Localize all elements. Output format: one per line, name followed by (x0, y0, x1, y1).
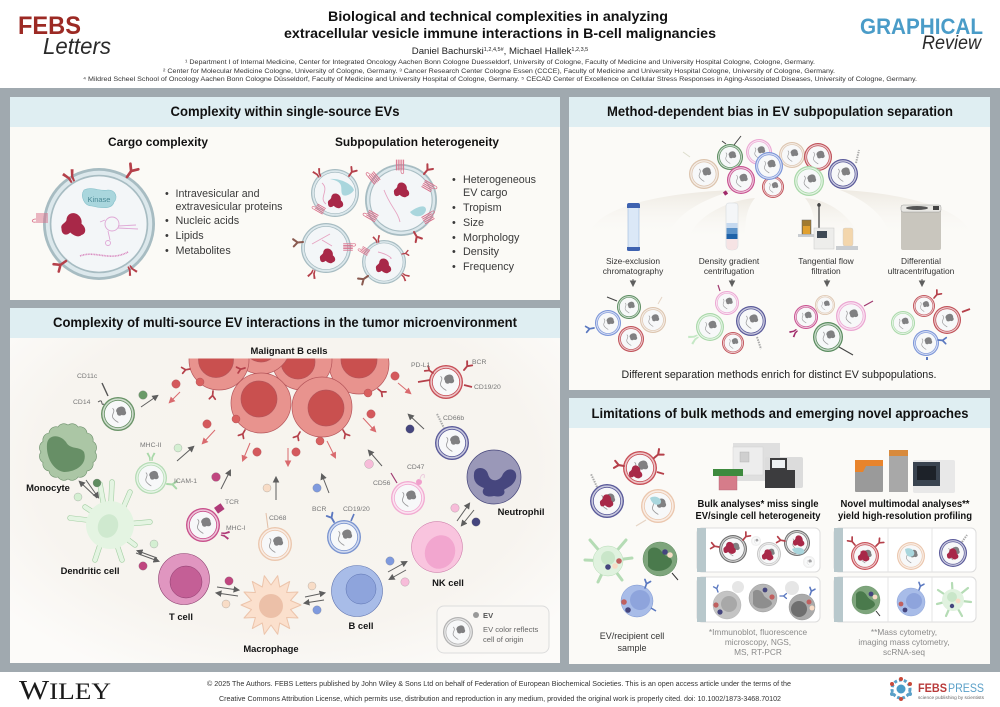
text: cargo bullet list (165, 188, 283, 257)
title: Biological and technical complexities in analyzing (328, 8, 668, 24)
text: subpopulation bullet list: EV cargo (463, 187, 507, 199)
EV: T-cell-derived with TCR and MHC-I (186, 499, 246, 542)
text: cargo bullet list: extravesicular proteins (176, 201, 283, 213)
legend: EV color reflects (483, 625, 538, 634)
method: differential ultracentrifugation (888, 205, 955, 285)
text: subpopulation bullet list: • (452, 202, 456, 214)
heading: bulk analyses: Bulk analyses* miss single (698, 499, 819, 510)
text: subpopulation bullet list: Morphology (463, 232, 520, 244)
EV: neutrophil-derived with CD66b: CD66b (443, 415, 464, 422)
text: subpopulation bullet list: Size (463, 217, 484, 229)
method: density gradient centrifugation: centrifugation (704, 266, 754, 276)
EV: neutrophil-derived with CD66b (435, 414, 469, 460)
EV: monocyte-derived with CD14 and CD11c: CD11c (77, 373, 98, 380)
EV: dendritic-cell-derived with MHC-II and ICAM-1 (135, 442, 197, 494)
heading: novel analyses (838, 499, 972, 522)
heading: bulk analyses (696, 499, 821, 522)
heading: single-source EVs: Complexity within single-source EVs (170, 104, 400, 119)
cell: T cell (158, 554, 210, 622)
method: tangential flow filtration: filtration (811, 266, 841, 276)
exchange arrows (80, 396, 474, 603)
footnote: bulk methods: MS, RT-PCR (734, 647, 782, 657)
EV: B-cell-derived with BCR and CD19/20: CD19/20 (343, 506, 370, 513)
EV: NK-cell-derived with CD56 and CD47: CD47 (407, 464, 425, 471)
cell: macrophage (241, 576, 301, 654)
cell: T cell: T cell (169, 611, 193, 622)
EV cluster: size-exclusion (586, 295, 666, 352)
cell: macrophage: Macrophage (243, 643, 299, 654)
logo: Graphical Review: Review (922, 33, 982, 54)
cell: B cell: B cell (348, 620, 374, 631)
text: cargo bullet list: Nucleic acids (176, 215, 240, 227)
text: subpopulation bullet list: • (452, 261, 456, 273)
EV: NK-cell-derived with CD56 and CD47 (373, 464, 425, 515)
illustration: cargo EV (32, 164, 155, 280)
footnote: bulk methods: microscopy, NGS, (725, 637, 791, 647)
novel results: cell box (834, 577, 976, 622)
footnote: bulk methods: *Immunoblot, fluorescence (709, 627, 807, 637)
cell: B cell (332, 566, 382, 631)
logo: FEBS Press (890, 677, 985, 701)
mixed EV population (683, 136, 859, 198)
title: extracellular vesicle immune interactions in B-cell malignancies (284, 25, 716, 41)
method: size-exclusion chromatography (603, 203, 664, 285)
text: subpopulation bullet list: Frequency (463, 261, 515, 273)
logo: FEBS Letters (18, 12, 111, 59)
title (284, 8, 716, 41)
affiliations: ¹ Department I of Internal Medicine, Center for Integrated Oncology Aachen Bonn Cologne Duesseldorf, University of Cologne, Faculty of Medicine and University Hospital Cologne, Cologne, Germany. (185, 59, 815, 66)
caption: separation methods: Different separation methods enrich for distinct EV subpopulations. (622, 369, 936, 381)
method: tangential flow filtration: Tangential flow (798, 256, 855, 266)
EV: dendritic-cell-derived with MHC-II and ICAM-1: MHC-II (140, 442, 162, 449)
text: subpopulation bullet list: • (452, 217, 456, 229)
cell: neutrophil: Neutrophil (498, 506, 544, 517)
panel: multi-source EV interactions (10, 308, 560, 663)
illustration: cargo EV: Kinase (88, 195, 110, 204)
method: tangential flow filtration (798, 203, 858, 285)
logo: Graphical Review: GRAPHICAL (860, 14, 983, 39)
affiliations (83, 59, 917, 83)
text: subpopulation bullet list: • (452, 174, 456, 186)
copyright text: © 2025 The Authors. FEBS Letters published by John Wiley & Sons Ltd on behalf of Federation of European Biochemical Societies. This is an open access article under the terms of the (207, 680, 791, 688)
logo: FEBS Press: FEBS (918, 681, 947, 695)
EV: dendritic-cell-derived with MHC-II and ICAM-1: ICAM-1 (174, 478, 197, 485)
method: size-exclusion chromatography: Size-exclusion (606, 256, 660, 266)
method: size-exclusion chromatography: chromatography (603, 266, 664, 276)
cell: dendritic cell (61, 482, 150, 576)
EV: NK-cell-derived with CD56 and CD47: CD56 (373, 480, 391, 487)
heading: limitations: Limitations of bulk methods and emerging novel approaches (592, 406, 968, 421)
EV: macrophage-derived with CD68 (258, 513, 292, 561)
text: cargo bullet list: • (165, 215, 169, 227)
label: EV/recipient cell sample: sample (617, 643, 647, 653)
heading: novel analyses: Novel multimodal analyses** (840, 499, 970, 510)
bulk results: EV box (697, 528, 820, 572)
bulk results: cell box (697, 577, 820, 622)
EV cluster: tangential flow (789, 295, 873, 355)
EV: T-cell-derived with TCR and MHC-I: MHC-I (226, 525, 246, 532)
logo: FEBS Press: science publishing by scientists (918, 695, 985, 700)
EV: macrophage-derived with CD68: CD68 (269, 515, 287, 522)
legend (437, 606, 549, 653)
method: density gradient centrifugation (699, 203, 760, 285)
authors: 1,2,4,5# (484, 47, 505, 53)
logo: Wiley: WILEY (19, 675, 111, 705)
method: density gradient centrifugation: Density gradient (699, 256, 760, 266)
label: EV/recipient cell sample: EV/recipient cell (600, 631, 664, 641)
EV cluster: differential ultracentrifugation (891, 290, 970, 360)
EV: malignant-B-cell-derived with PD-L1, BCR, CD19/20: CD19/20 (474, 384, 501, 391)
affiliations: ² Center for Molecular Medicine Cologne, University of Cologne, Germany. ³ Cancer Research Center Cologne Essen (CCCE), Faculty of Medicine and University Hospital Cologne, University of Cologne, Germany. (163, 68, 835, 75)
text: subpopulation bullet list (452, 174, 537, 273)
cell: monocyte (26, 424, 97, 493)
panel: complexity within single-source EVs (10, 97, 560, 300)
method: differential ultracentrifugation: Differential (901, 256, 941, 266)
footnote: novel methods: **Mass cytometry, (871, 627, 937, 637)
footnote: novel methods (858, 627, 950, 657)
text: cargo bullet list: Lipids (176, 230, 204, 242)
logo: Graphical Review (860, 14, 983, 54)
logo: FEBS Letters: FEBS (18, 12, 81, 40)
panel: limitations of bulk methods (569, 398, 990, 664)
text: cargo bullet list: Metabolites (176, 245, 231, 257)
text: subpopulation bullet list: • (452, 232, 456, 244)
vesicles travelling between cells (74, 391, 480, 614)
panel: method-dependent bias (569, 97, 990, 390)
text: cargo bullet list: • (165, 230, 169, 242)
copyright text (207, 680, 791, 703)
novel results: EV box (834, 528, 976, 572)
logo: FEBS Press: PRESS (948, 681, 984, 695)
logo: FEBS Letters: Letters (43, 33, 111, 59)
EV: monocyte-derived with CD14 and CD11c (73, 373, 135, 431)
heading: method-dependent bias: Method-dependent bias in EV subpopulation separation (607, 104, 953, 119)
EV cluster: density gradient (687, 285, 766, 354)
affiliations: ⁴ Mildred Scheel School of Oncology Aachen Bonn Cologne Düsseldorf, Faculty of Medicine and University Hospital of Cologne, Germany. ⁵ CECAD Center of Excellence on Cellular Stress Responses in Aging-Associated Diseases, University of Cologne, Germany. (83, 76, 917, 83)
label: malignant B cells: Malignant B cells (250, 345, 328, 356)
EV: monocyte-derived with CD14 and CD11c: CD14 (73, 399, 91, 406)
text: cargo bullet list: • (165, 245, 169, 257)
instruments: novel analyses (855, 450, 955, 493)
EV: malignant-B-cell-derived with PD-L1, BCR, CD19/20: BCR (472, 359, 486, 366)
cell: NK cell: NK cell (432, 577, 464, 588)
cell: monocyte: Monocyte (26, 482, 70, 493)
instruments: bulk analyses (713, 443, 803, 490)
cell: neutrophil (467, 450, 544, 517)
heading: bulk analyses: EV/single cell heterogeneity (696, 511, 821, 522)
copyright text: Creative Commons Attribution License, which permits use, distribution and reproduction in any medium, provided the original work is properly cited. doi: 10.1002/1873-3468.70102 (219, 696, 781, 703)
text: subpopulation bullet list: • (452, 246, 456, 258)
malignant B cell cluster (180, 358, 390, 446)
illustration: EV subpopulations (293, 160, 437, 284)
text: subpopulation bullet list: Heterogeneous (463, 174, 537, 186)
text: cargo bullet list: Intravesicular and (176, 188, 260, 200)
subheading: cargo complexity: Cargo complexity (108, 135, 208, 149)
cell: NK cell (412, 522, 464, 588)
separation fan background (590, 190, 970, 240)
subheading: subpopulation heterogeneity: Subpopulation heterogeneity (335, 135, 499, 149)
footnote: bulk methods (709, 627, 807, 657)
text: cargo bullet list: • (165, 188, 169, 200)
EV: malignant-B-cell-derived with PD-L1, BCR, CD19/20 (411, 359, 501, 399)
heading: multi-source interactions: Complexity of multi-source EV interactions in the tumor microenvironment (53, 315, 517, 330)
sample EVs and cells (585, 449, 678, 617)
text: subpopulation bullet list: Density (463, 246, 500, 258)
cell: dendritic cell: Dendritic cell (61, 565, 119, 576)
text: subpopulation bullet list: Tropism (463, 202, 502, 214)
footnote: novel methods: imaging mass cytometry, (858, 637, 950, 647)
heading: novel analyses: yield high-resolution profiling (838, 511, 972, 522)
EV: T-cell-derived with TCR and MHC-I: TCR (225, 499, 239, 506)
footnote: novel methods: scRNA-seq (883, 647, 925, 657)
legend: cell of origin (483, 635, 524, 644)
EV: B-cell-derived with BCR and CD19/20: BCR (312, 506, 326, 513)
authors: 1,2,3,5 (571, 47, 588, 53)
EVs released by malignant B cells with arrows (170, 372, 410, 465)
label: EV/recipient cell sample (600, 631, 664, 653)
legend: EV (483, 611, 494, 620)
method: differential ultracentrifugation: ultracentrifugation (888, 266, 955, 276)
authors: Daniel Bachurski (412, 46, 484, 57)
EV: malignant-B-cell-derived with PD-L1, BCR, CD19/20: PD-L1 (411, 362, 430, 369)
authors: , Michael Hallek (504, 46, 572, 57)
EV: B-cell-derived with BCR and CD19/20 (312, 506, 370, 554)
